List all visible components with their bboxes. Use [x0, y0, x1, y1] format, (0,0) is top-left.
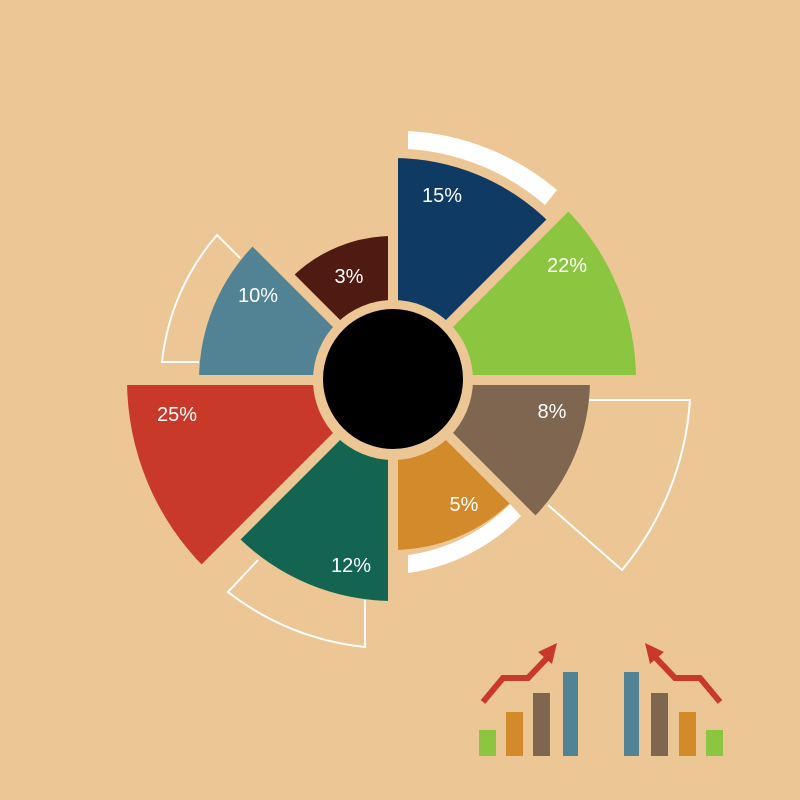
sector 10% blue-grey	[199, 243, 393, 380]
arrow: up-right	[483, 643, 557, 702]
label 5%: 5%	[450, 494, 479, 516]
sector 5% orange	[393, 380, 513, 550]
label 10%: 10%	[238, 285, 278, 307]
outline: blue-grey extension	[162, 235, 240, 362]
outline: brown extension	[548, 400, 690, 570]
arrow: up-left	[645, 643, 720, 702]
bar chart: rising	[479, 643, 578, 756]
white band: bottom	[408, 504, 521, 573]
sector 8% brown	[393, 380, 590, 519]
label 25%: 25%	[157, 404, 197, 426]
sector 12% teal	[237, 380, 393, 601]
outline: teal extension	[228, 560, 365, 647]
label 8%: 8%	[538, 401, 567, 423]
center black circle	[323, 309, 463, 449]
label 3%: 3%	[335, 266, 364, 288]
pie chart	[100, 100, 700, 660]
sector 15% navy	[393, 158, 550, 380]
sector 3% maroon	[291, 236, 393, 380]
white band: top	[408, 131, 557, 205]
label 15%: 15%	[422, 185, 462, 207]
label 22%: 22%	[547, 255, 587, 277]
bar chart: falling	[624, 643, 723, 756]
label 12%: 12%	[331, 555, 371, 577]
sector 22% green	[393, 208, 636, 380]
sector 25% red	[127, 380, 393, 568]
